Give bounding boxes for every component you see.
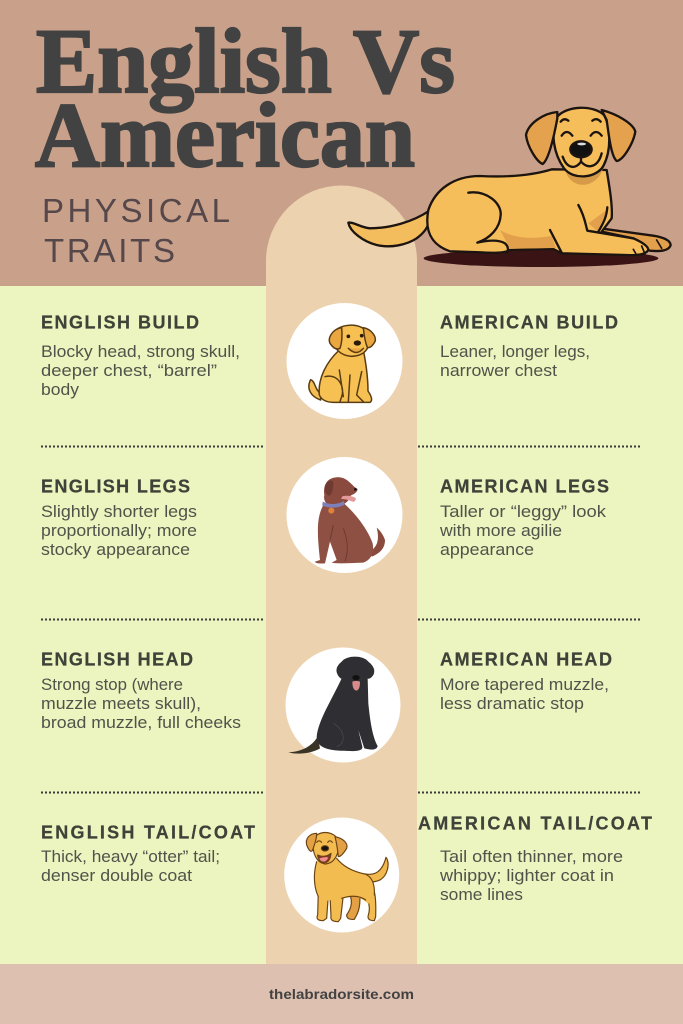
footer website: thelabradorsite.com [269, 986, 414, 1002]
text: English tail and coat: ENGLISH TAIL/COAT [41, 822, 255, 842]
panel: footer background [0, 964, 683, 1024]
text: American tail and coat: Tail often thinner, more [440, 847, 623, 866]
panel: central arched column [266, 186, 417, 964]
text: English legs: proportionally; more [41, 521, 197, 540]
text: American tail and coat [418, 814, 652, 904]
icon: black labrador in circle [286, 648, 400, 762]
text: American tail and coat: AMERICAN TAIL/COAT [418, 814, 652, 834]
text: American head: AMERICAN HEAD [440, 650, 612, 670]
text: English build: ENGLISH BUILD [41, 312, 199, 332]
text: English legs [41, 476, 197, 559]
text: English tail and coat: denser double coat [41, 866, 192, 885]
row: head [41, 648, 642, 792]
panel: header background [0, 0, 683, 286]
subtitle: PHYSICAL [42, 192, 230, 229]
text: English build: deeper chest, “barrel” [41, 361, 217, 380]
text: English build [41, 312, 240, 399]
icon: chocolate labrador in circle [286, 457, 402, 573]
text: English head: Strong stop (where [41, 675, 183, 694]
text: English head: muzzle meets skull), [41, 694, 201, 713]
text: American legs: with more agilie [439, 521, 562, 540]
text: American legs [439, 476, 609, 559]
illustration: lying yellow labrador [348, 108, 671, 267]
text: American legs: appearance [440, 540, 534, 559]
text: English legs: stocky appearance [41, 540, 190, 559]
text: English head [41, 650, 241, 732]
icon: yellow puppy in circle [286, 303, 402, 419]
subtitle: TRAITS [44, 232, 175, 269]
text: English tail and coat: Thick, heavy “otter” tail; [41, 847, 220, 866]
title [35, 10, 455, 186]
text: English tail and coat [41, 822, 255, 885]
text: English legs: ENGLISH LEGS [41, 476, 190, 496]
text: American head: less dramatic stop [440, 694, 584, 713]
subtitle [42, 192, 230, 269]
row: tail and coat [41, 814, 652, 932]
icon: standing yellow labrador in circle [284, 818, 399, 932]
text: English head: ENGLISH HEAD [41, 650, 193, 670]
text: American head: More tapered muzzle, [440, 675, 609, 694]
row: legs [41, 457, 642, 620]
text: American tail and coat: some lines [440, 885, 523, 904]
title: American [35, 84, 415, 186]
text: American legs: AMERICAN LEGS [440, 476, 609, 496]
text: American legs: Taller or “leggy” look [440, 502, 607, 521]
text: American tail and coat: whippy; lighter coat in [439, 866, 614, 885]
text: American build: AMERICAN BUILD [440, 312, 618, 332]
text: English build: body [41, 380, 80, 399]
text: English head: broad muzzle, full cheeks [41, 713, 241, 732]
text: American build: narrower chest [440, 361, 557, 380]
text: English build: Blocky head, strong skull, [41, 342, 240, 361]
text: American head [440, 650, 612, 713]
panel: body background [0, 286, 683, 964]
text: English legs: Slightly shorter legs [41, 502, 197, 521]
text: American build [440, 312, 618, 380]
row: build [41, 303, 642, 446]
title: English Vs [36, 10, 455, 112]
text: American build: Leaner, longer legs, [440, 342, 590, 361]
